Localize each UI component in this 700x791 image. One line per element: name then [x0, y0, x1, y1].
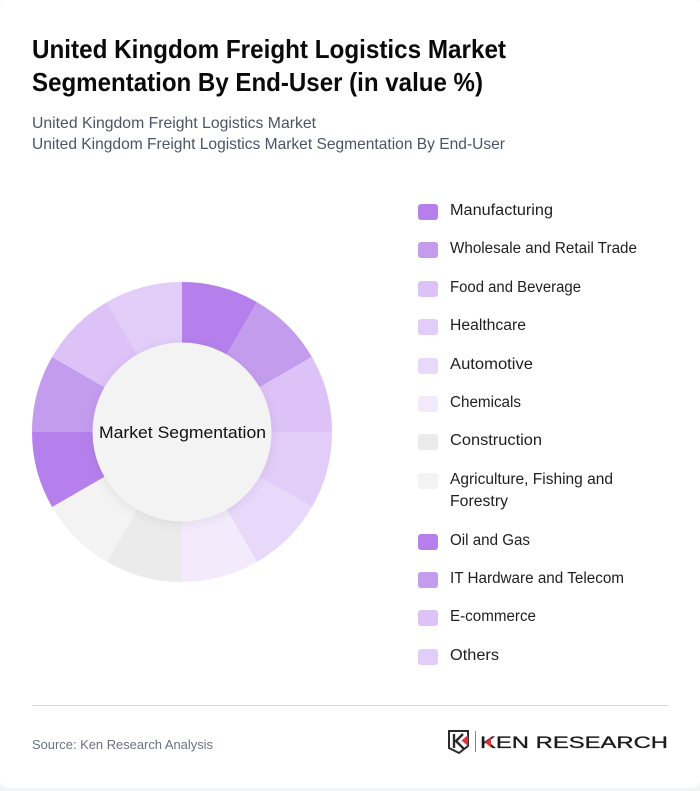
legend item: Food and Beverage: Food and Beverage — [450, 279, 581, 296]
legend item: Oil and Gas — [418, 532, 530, 550]
legend item: E-commerce: E-commerce — [450, 608, 536, 625]
legend item: Manufacturing: Manufacturing — [450, 202, 553, 219]
icon: shield — [449, 731, 468, 753]
segment: E-commerce — [52, 302, 182, 432]
segment: Food and Beverage — [182, 357, 332, 432]
segment: Chemicals — [182, 432, 257, 582]
legend item: Chemicals — [418, 394, 521, 412]
legend item: Chemicals: Chemicals — [450, 394, 521, 411]
subtitle: United Kingdom Freight Logistics Market — [32, 115, 317, 132]
segment: Oil and Gas — [32, 432, 182, 507]
segment: Automotive — [182, 432, 312, 562]
source note: Source: Ken Research Analysis — [32, 737, 213, 752]
legend item: Construction — [418, 432, 542, 450]
donut chart — [32, 282, 332, 582]
legend item: Oil and Gas: Oil and Gas — [450, 532, 530, 549]
legend item: IT Hardware and Telecom: IT Hardware and Telecom — [450, 570, 624, 587]
legend — [418, 202, 637, 665]
legend item: Healthcare: Healthcare — [450, 317, 526, 334]
legend item: Wholesale and Retail Trade: Wholesale and Retail Trade — [450, 240, 637, 257]
legend item: Manufacturing — [418, 202, 553, 220]
legend item: Agriculture, Fishing and Forestry: Agriculture, Fishing and — [450, 471, 613, 488]
segment: IT Hardware and Telecom — [32, 357, 182, 432]
title: United Kingdom Freight Logistics Market — [32, 34, 506, 64]
wordmark: KEN RESEARCH — [480, 733, 668, 752]
segment: Wholesale and Retail Trade — [182, 302, 312, 432]
title — [32, 34, 506, 97]
logo: Ken Research — [449, 731, 668, 753]
icon: red wedge in K — [485, 738, 491, 748]
subtitle: United Kingdom Freight Logistics Market Segmentation By End-User — [32, 136, 506, 153]
segment: Healthcare — [182, 432, 332, 507]
segment: Others — [107, 282, 182, 432]
segment: Construction — [107, 432, 182, 582]
donut centre — [92, 342, 272, 522]
legend item: Agriculture, Fishing and Forestry — [418, 471, 613, 510]
legend item: Healthcare — [418, 317, 526, 335]
legend item: E-commerce — [418, 608, 536, 626]
title: Segmentation By End-User (in value %) — [32, 67, 483, 97]
centre label: Market Segmentation — [99, 423, 266, 442]
legend item: Others: Others — [450, 647, 499, 664]
legend item: Automotive: Automotive — [450, 356, 533, 373]
legend item: Automotive — [418, 356, 533, 374]
legend item: Construction: Construction — [450, 432, 542, 449]
segment: Manufacturing — [182, 282, 257, 432]
subtitle — [32, 115, 506, 153]
legend item: Agriculture, Fishing and Forestry: Forestry — [450, 493, 508, 510]
legend item: Others — [418, 647, 499, 665]
segment: Agriculture, Fishing and Forestry — [52, 432, 182, 562]
